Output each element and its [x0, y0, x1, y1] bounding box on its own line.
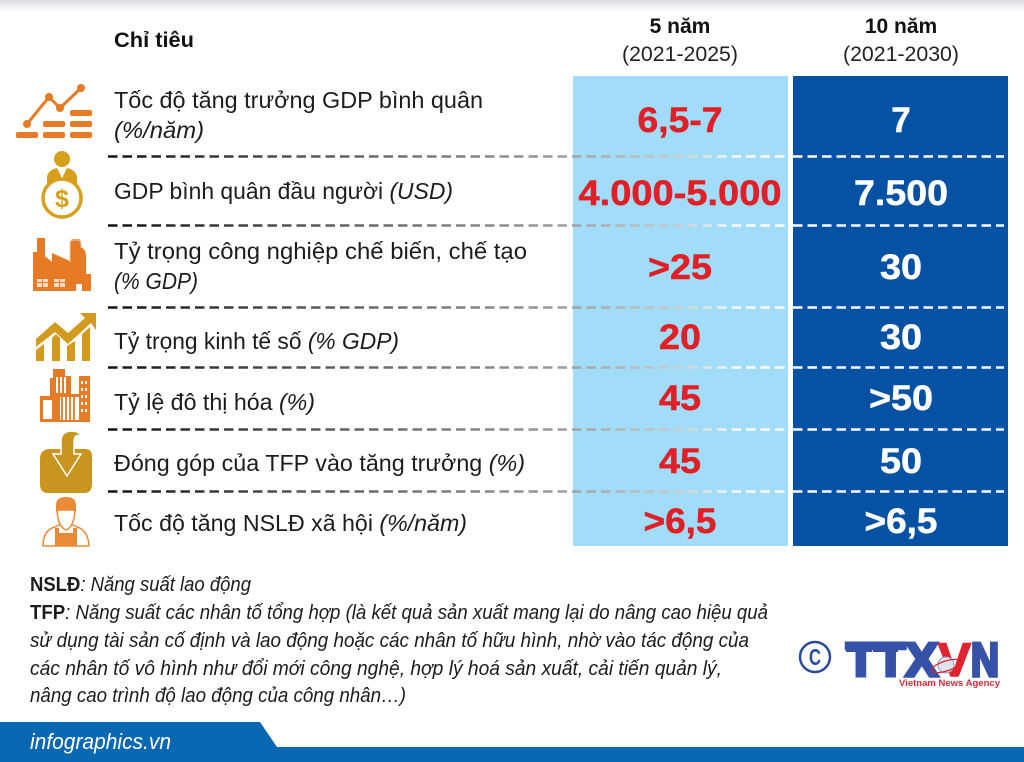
logo: TTXVN [800, 633, 1001, 689]
row 1 label [114, 87, 483, 143]
footnotes: sử dụng tài sản cố định và lao động hoặc các nhân tố hữu hình, nhờ vào tác động của [30, 629, 749, 652]
icon: person with dollar coin: $ [55, 185, 69, 213]
footnotes: nâng cao trình độ lao động của công nhân…) [30, 684, 406, 707]
values: 5 year column: 20 [659, 318, 701, 357]
values: 5 year column: 45 [659, 442, 701, 481]
panel: 5 year column background [573, 76, 788, 546]
header: 10 year column: 10 năm [865, 15, 937, 38]
values: 10 year column: 7 [891, 101, 911, 140]
footnotes: TFP: Năng suất các nhân tố tổng hợp (là kết quả sản xuất mang lại do nâng cao hiệu quả [30, 601, 768, 624]
values: 10 year column: 30 [880, 248, 922, 287]
icon: rising bar chart with arrow [36, 313, 96, 361]
row 2 label: GDP bình quân đầu người (USD) [114, 178, 453, 204]
row 3 label: Tỷ trọng công nghiệp chế biến, chế tạo [114, 238, 527, 264]
values: 5 year column: 4.000-5.000 [578, 174, 782, 213]
icon: city buildings [40, 369, 90, 422]
values: 10 year column: >50 [869, 379, 933, 418]
row 1 label: Tốc độ tăng trưởng GDP bình quân [114, 87, 483, 113]
footnotes: NSLĐ: Năng suất lao động [30, 573, 252, 596]
row 3 label: (% GDP) [114, 268, 198, 294]
values: 10 year column [854, 101, 948, 541]
icon: inbox with down arrow [40, 431, 92, 493]
panel: 10 year column background [793, 76, 1008, 546]
row 5 label: Tỷ lệ đô thị hóa (%) [114, 389, 315, 415]
logo: TTXVN: C [809, 644, 821, 670]
row 4 label: Tỷ trọng kinh tế số (% GDP) [114, 328, 399, 354]
footer site name: infographics.vn [30, 729, 171, 754]
header: 5 year column: (2021-2025) [622, 43, 738, 66]
header: 10 year column [843, 15, 959, 66]
footnotes: các nhân tố vô hình như đổi mới công nghệ, hợp lý hoá sản xuất, cải tiến quản lý, [30, 657, 722, 680]
values: 10 year column: 50 [880, 442, 922, 481]
footer band [0, 722, 1024, 762]
row 6 label: Đóng góp của TFP vào tăng trưởng (%) [114, 450, 525, 476]
values: 10 year column: 7.500 [854, 174, 948, 213]
icon: factory [33, 238, 91, 291]
header: 5 year column [622, 15, 738, 66]
values: 10 year column: 30 [880, 318, 922, 357]
header: indicator column: Chỉ tiêu [114, 29, 194, 52]
top photo strip [0, 0, 1024, 12]
header: 5 year column: 5 năm [650, 15, 710, 38]
header: 10 year column: (2021-2030) [843, 43, 959, 66]
values: 5 year column: >25 [648, 248, 712, 287]
icon: worker [43, 497, 89, 546]
values: 5 year column: >6,5 [644, 502, 716, 541]
logo: TTXVN: TTX [846, 633, 938, 686]
icon: GDP growth chart [16, 84, 92, 138]
values: 5 year column: 45 [659, 379, 701, 418]
row 3 label [114, 238, 527, 294]
values: 5 year column: 6,5-7 [638, 101, 722, 140]
row 1 label: (%/năm) [114, 117, 204, 143]
row 7 label: Tốc độ tăng NSLĐ xã hội (%/năm) [114, 510, 467, 536]
logo: TTXVN: N [971, 633, 999, 686]
logo: TTXVN: Vietnam News Agency [899, 678, 1001, 689]
logo: TTXVN: V [938, 633, 972, 686]
footnotes [30, 573, 768, 707]
values: 10 year column: >6,5 [864, 502, 938, 541]
icon: person with dollar coin [43, 151, 81, 217]
values: 5 year column [578, 101, 782, 541]
